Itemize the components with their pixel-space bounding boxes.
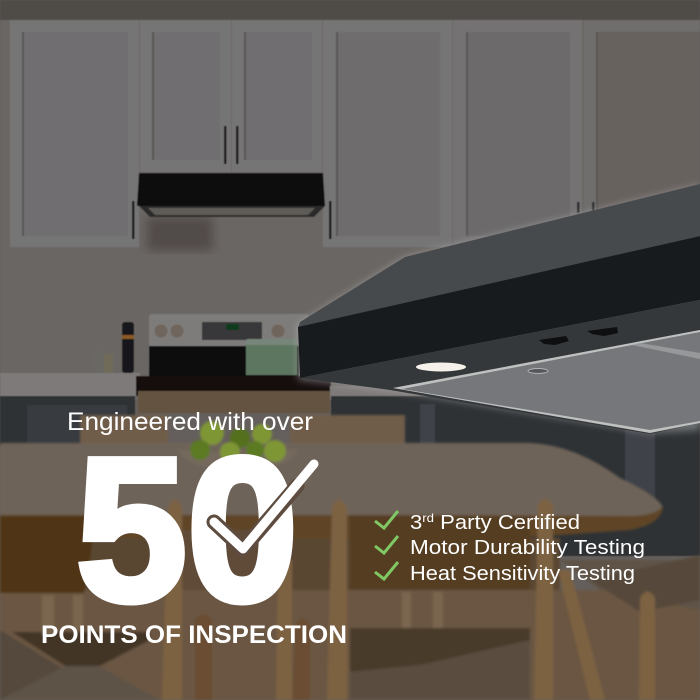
check mark [214, 464, 314, 549]
background: dining table, chairs, floor [0, 415, 700, 700]
shadow under table and chair backs [0, 516, 700, 610]
woven chair seats [0, 555, 700, 700]
hood control knobs [539, 327, 618, 345]
item: 3rd party certified: Party Certified [434, 512, 580, 534]
upper cabinets [10, 20, 700, 247]
hood front band [298, 236, 700, 378]
small background range hood [137, 173, 325, 251]
hood light [416, 362, 466, 372]
hood underside [300, 300, 700, 434]
back chairs [80, 415, 405, 445]
item: heat sensitivity testing: Heat Sensitivity Testing [410, 563, 635, 585]
item: motor durability testing: Motor Durability Testing [410, 537, 645, 559]
hood glow [298, 185, 700, 433]
hood sensor [528, 368, 548, 374]
heading: engineered with over: Engineered with over [67, 408, 313, 436]
mesh filter [393, 330, 700, 432]
check mark outline [214, 486, 297, 549]
hood top face [298, 184, 700, 328]
chair posts [42, 499, 655, 700]
counter and lower cabinets [0, 373, 700, 556]
icon: green check 3 [375, 562, 398, 579]
background: kitchen wall and cabinets [0, 0, 700, 556]
big number 50 with check mark: 50 [76, 416, 298, 644]
icon: green check 2 [375, 536, 398, 553]
checklist [375, 511, 645, 585]
table [0, 443, 663, 527]
item: 3rd party certified: rd [422, 511, 434, 525]
icon: green check 1 [375, 511, 398, 528]
stove with pot and bottles [94, 314, 309, 378]
foreground range hood [298, 184, 700, 434]
fruit bowl [177, 421, 298, 472]
item: 3rd party certified: 3 [410, 512, 421, 534]
subheading: points of inspection: POINTS OF INSPECTION [41, 621, 347, 649]
